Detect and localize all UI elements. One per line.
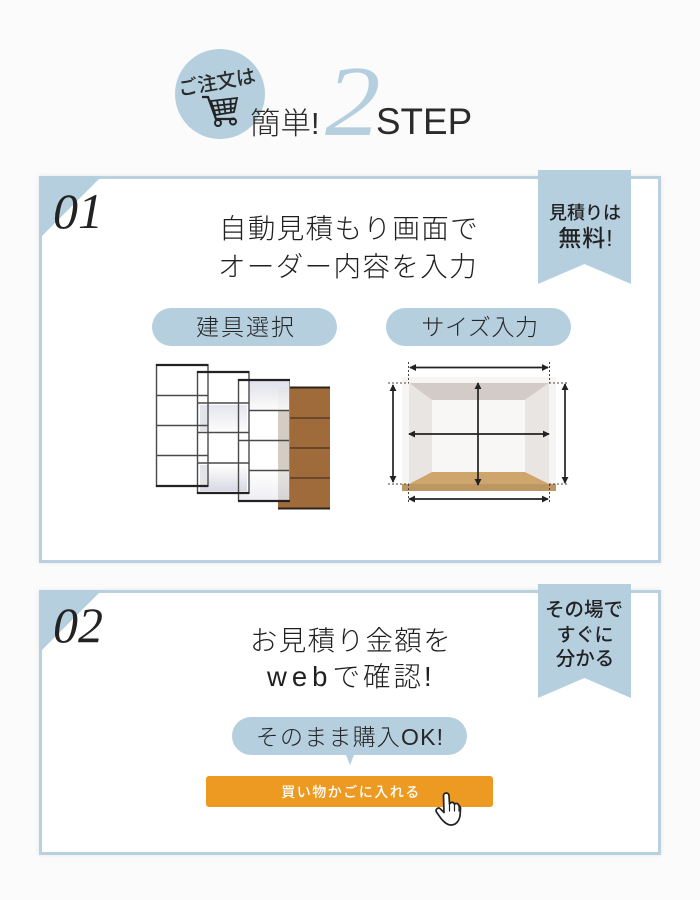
panel frame [40, 592, 660, 854]
ribbon: free estimate [538, 170, 631, 284]
button: add to cart: 買い物かごに入れる [281, 784, 421, 800]
step 02 heading [250, 625, 452, 692]
pill: size input: サイズ入力 [421, 314, 539, 340]
pill: size input [386, 308, 571, 346]
icon: shopping cart [202, 97, 237, 126]
room [402, 377, 556, 487]
heading text: easy: 簡単! [250, 107, 319, 141]
door 4 wood [278, 387, 330, 509]
step 01 heading [218, 213, 479, 282]
header title [175, 45, 472, 157]
step 01 heading: オーダー内容を入力 [218, 251, 478, 282]
door 3 glass [238, 379, 290, 501]
panel frame [40, 178, 660, 562]
ribbon: free estimate: 見積りは [549, 203, 621, 223]
badge circle: order: ご注文は [177, 65, 257, 101]
ribbon: free estimate: 無料! [558, 225, 614, 251]
side walls [409, 383, 549, 484]
corner triangle [39, 590, 102, 653]
heading text: STEP: STEP [376, 101, 472, 142]
panel: step 02 [39, 584, 660, 854]
door frames and rails [156, 364, 290, 501]
step 02 heading: webで確認! [266, 661, 435, 692]
ribbon: check on the spot [538, 584, 631, 698]
corner triangle [39, 176, 102, 239]
step 02 heading: お見積り金額を [250, 625, 452, 656]
pill: fittings selection [152, 308, 337, 346]
floor [402, 472, 556, 491]
ribbon: check on the spot: すぐに [556, 625, 614, 646]
step number 01: 01 [53, 183, 103, 239]
dimension arrows [393, 368, 565, 499]
door 1 frame [156, 364, 208, 486]
step number 02: 02 [53, 597, 103, 653]
speech bubble: buy as is: そのまま購入OK! [256, 724, 444, 750]
icon: pointer hand [436, 793, 460, 825]
dashed guides [388, 362, 569, 504]
door 2 glass [197, 371, 249, 493]
speech bubble: buy as is [232, 717, 467, 765]
ribbon: check on the spot: その場で [545, 599, 623, 621]
badge circle: order [175, 49, 265, 139]
button: add to cart [206, 776, 493, 807]
ribbon: check on the spot: 分かる [556, 648, 614, 670]
illustration: door panels [156, 364, 330, 509]
panel: step 01 [39, 170, 660, 562]
big numeral 2: 2 [325, 45, 381, 157]
pill: fittings selection: 建具選択 [196, 314, 296, 340]
illustration: room dimensions [388, 362, 569, 504]
step 01 heading: 自動見積もり画面で [219, 213, 479, 244]
ceiling [409, 383, 549, 400]
